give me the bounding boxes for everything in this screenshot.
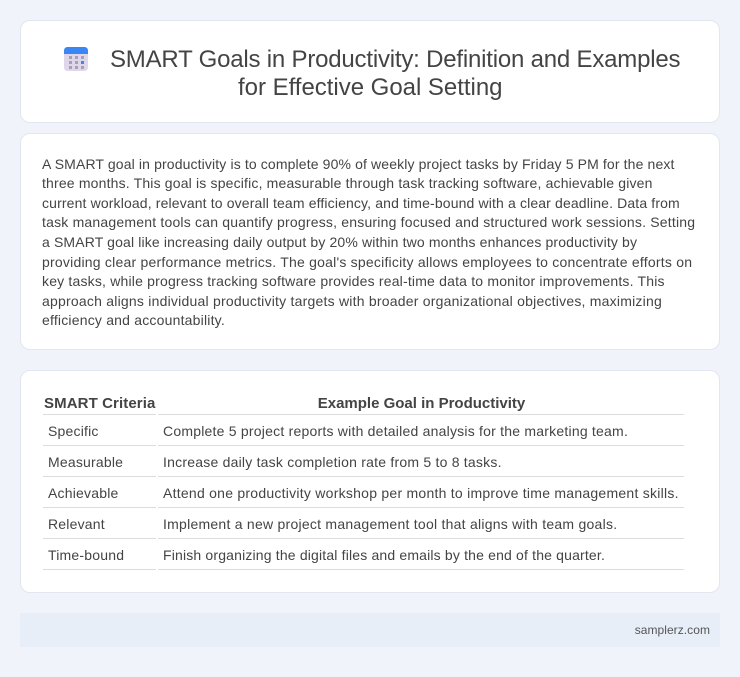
text block: description (42, 156, 695, 328)
text block: description: approach aligns individual productivity targets with broader organizational objectives, maximizing (42, 293, 662, 309)
row: Achievable: Attend one productivity workshop per month to improve time management skills. (163, 485, 679, 501)
title (110, 46, 680, 101)
panel: title card (20, 20, 720, 123)
panel: description text (20, 133, 720, 350)
text block: description: key tasks, while progress tracking software provides real-time data to monitor improvements. This (42, 273, 665, 289)
row: Time-bound: Finish organizing the digital files and emails by the end of the quarter. (163, 547, 605, 563)
table header: SMART Criteria (44, 395, 155, 412)
footer bar (20, 613, 720, 647)
table header: Example Goal in Productivity (318, 395, 525, 412)
table: SMART criteria (43, 395, 684, 570)
text block: description: current workload, relevant to overall team efficiency, and time-bound with a clear deadline. Data from (42, 195, 680, 211)
panel: table card (20, 370, 720, 593)
row: Specific: Specific (48, 423, 99, 439)
row: Achievable: Achievable (48, 485, 118, 501)
row: Specific: Complete 5 project reports with detailed analysis for the marketing team. (163, 423, 628, 439)
row: Relevant: Relevant (48, 516, 105, 532)
title: SMART Goals in Productivity: Definition and Examples (110, 46, 680, 73)
text block: description: providing clear performance metrics. The goal's specificity allows employees to concentrate efforts on (42, 254, 692, 270)
row: Time-bound: Time-bound (48, 547, 124, 563)
text block: description: task management tools can quantify progress, ensuring focused and structured work sessions. Setting (42, 214, 695, 230)
text block: description: a SMART goal like increasing daily output by 20% within two months enhances productivity by (42, 234, 637, 250)
text block: description: efficiency and accountability. (42, 312, 225, 328)
row: Relevant: Implement a new project management tool that aligns with team goals. (163, 516, 617, 532)
title: for Effective Goal Setting (238, 74, 503, 101)
row: Measurable: Increase daily task completion rate from 5 to 8 tasks. (163, 454, 502, 470)
footer text: samplerz.com (635, 623, 710, 637)
icon: calendar (64, 47, 88, 71)
table header (44, 395, 526, 412)
row: Measurable: Measurable (48, 454, 123, 470)
text block: description: A SMART goal in productivity is to complete 90% of weekly project tasks by Friday 5 PM for the next (42, 156, 675, 172)
text block: description: three months. This goal is specific, measurable through task tracking software, achievable given (42, 175, 653, 191)
